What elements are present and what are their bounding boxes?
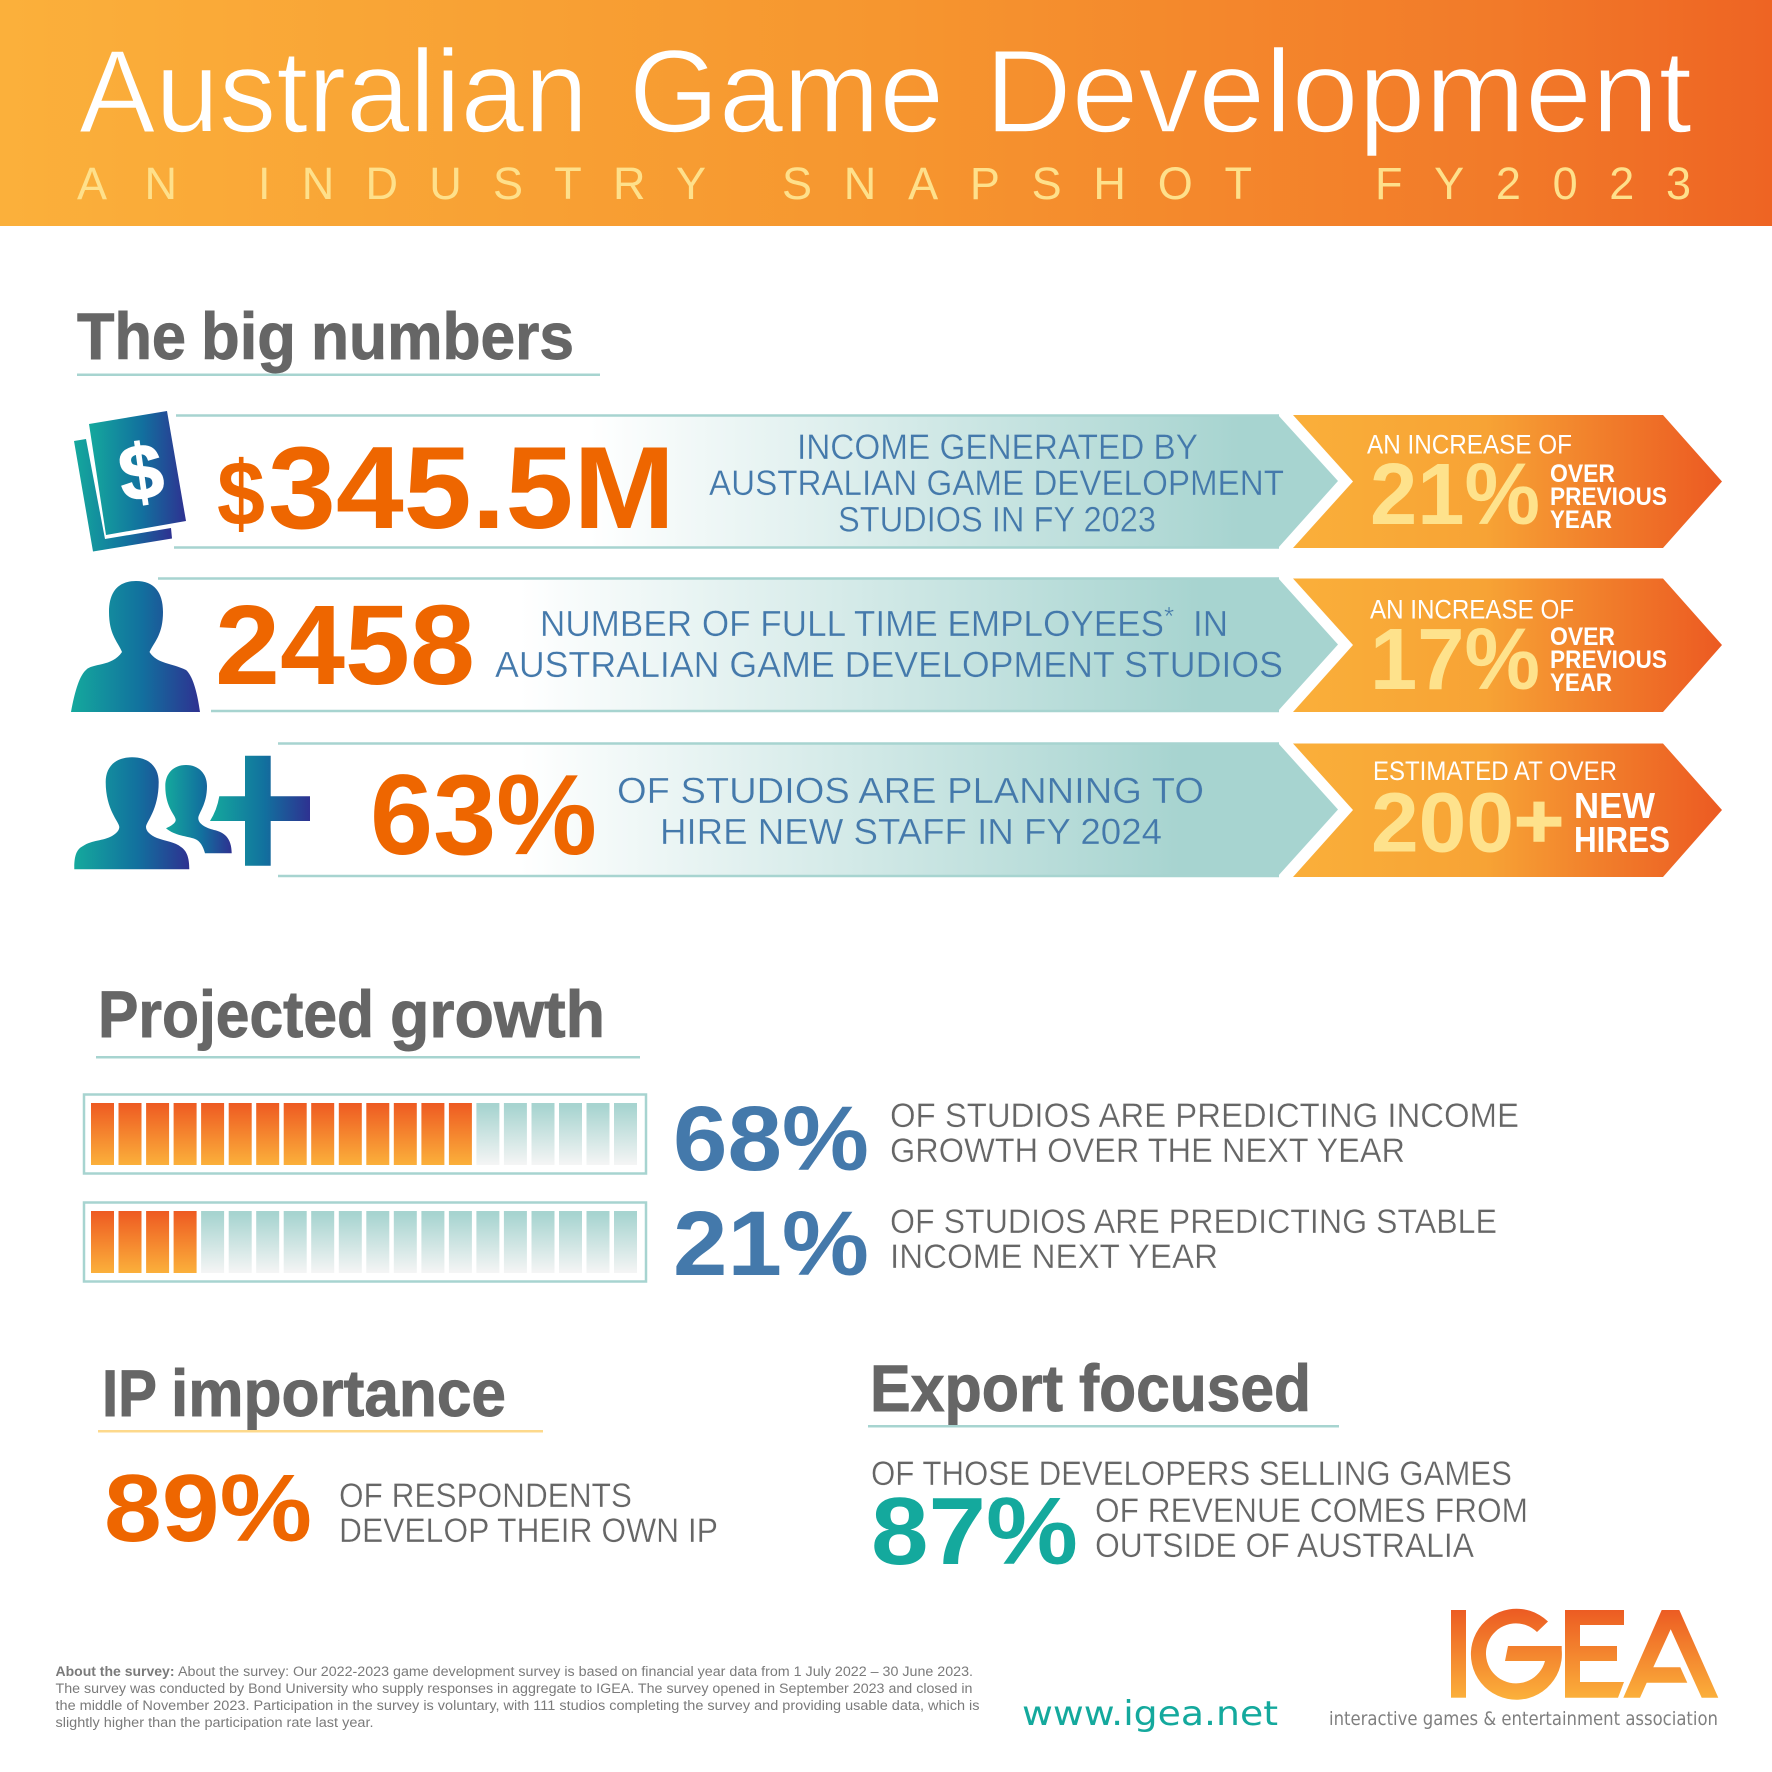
heading: the big numbers: numbers [311,299,574,373]
description: HIRE NEW STAFF IN FY 2024 [660,811,1162,852]
orange arrow: 17% increase: OVER [1550,623,1615,651]
heading: IP importance: IP [102,1356,157,1430]
orange arrow: 17% increase [1293,578,1722,712]
text: stable income: INCOME NEXT YEAR [890,1238,1218,1276]
progress bar: 68% income growth [84,1094,646,1174]
orange arrow: 17% increase: AN INCREASE OF [1370,594,1574,624]
title: Game [629,26,944,158]
text: own IP: DEVELOP THEIR OWN IP [339,1512,718,1550]
footnote: about the survey: About the survey: Our 2022-2023 game development survey is based on financial year data from 1 July 2022 – 30 June 2023. [178,1664,973,1679]
orange arrow: 21% increase: OVER [1550,460,1615,488]
description [709,428,1284,540]
footnote: about the survey: About the survey: [56,1664,174,1679]
stat: 2458: 2458 [215,582,475,708]
text: income growth: GROWTH OVER THE NEXT YEAR [890,1132,1405,1170]
heading: the big numbers: The [77,299,186,373]
footnote: about the survey [56,1664,980,1730]
title [79,26,1692,158]
subtitle: FY2023 [1375,158,1691,209]
orange arrow: 17% increase: PREVIOUS [1550,646,1667,674]
icon: people with plus [74,756,310,869]
stat: 68%: 68% [673,1088,869,1190]
subtitle: INDUSTRY [258,158,706,209]
orange arrow: 21% increase: PREVIOUS [1550,483,1667,511]
orange arrow: 200+ new hires: 200 [1371,776,1514,870]
stat: 21%: 21% [673,1193,869,1295]
stat: 87%: 87% [871,1478,1078,1585]
orange arrow: 21% increase: YEAR [1550,506,1612,534]
text: own IP: OF RESPONDENTS [339,1477,632,1515]
description [495,601,1283,685]
subtitle [77,158,1691,209]
orange arrow: 21% increase [1293,415,1722,548]
footnote: about the survey: The survey was conducted by Bond University who supply responses in aggregate to IGEA. The survey opened in September 2023 and closed in [56,1681,972,1696]
heading: the big numbers: big [201,299,296,373]
row: income [74,411,1722,553]
subtitle: SNAPSHOT [782,158,1252,209]
title: Development [985,26,1692,158]
text: export revenue [1095,1492,1528,1565]
stat: 89%: 89% [104,1455,312,1562]
text: own IP [339,1477,718,1550]
row: hiring [74,743,1722,879]
title: Australian [79,26,588,158]
subtitle: AN [77,158,177,209]
orange arrow: 21% increase: 21% [1370,446,1540,543]
text: export revenue: OF REVENUE COMES FROM [1095,1492,1528,1530]
heading: export focused [868,1351,1339,1428]
description [617,770,1204,852]
orange arrow: 200+ new hires: HIRES [1574,819,1670,860]
description: * [1164,601,1174,631]
heading: export focused: focused [1079,1351,1311,1425]
description: AUSTRALIAN GAME DEVELOPMENT [709,464,1284,503]
description: AUSTRALIAN GAME DEVELOPMENT STUDIOS [495,644,1283,685]
text: export intro: OF THOSE DEVELOPERS SELLING GAMES [871,1455,1512,1493]
orange arrow: 17% increase: YEAR [1550,669,1612,697]
teal arrow band [158,578,1338,711]
icon: banknotes with dollar sign: $ [113,425,169,519]
description: IN [1193,603,1228,644]
heading: the big numbers [77,299,600,376]
heading: IP importance: importance [171,1356,506,1430]
heading: projected growth: Projected [98,977,374,1051]
logo tagline: interactive games & entertainment association [1329,1708,1718,1730]
orange arrow: 200+ new hires: + [1514,779,1564,864]
heading: projected growth [96,977,640,1058]
stat: $345.5M: 345.5M [268,422,675,553]
stat: $345.5M: $ [217,443,265,545]
text: income growth [890,1097,1519,1170]
progress bar: 21% stable income [84,1202,646,1282]
heading: projected growth: growth [390,977,605,1051]
orange arrow: 17% increase: 17% [1370,611,1540,708]
text: export revenue: OUTSIDE OF AUSTRALIA [1095,1527,1474,1565]
orange arrow: 200+ new hires [1293,744,1722,877]
text: income growth: OF STUDIOS ARE PREDICTING INCOME [890,1097,1519,1135]
text: stable income: OF STUDIOS ARE PREDICTING STABLE [890,1203,1497,1241]
footnote: about the survey: the middle of November 2023. Participation in the survey is voluntary, with 111 studios completing the survey and providing usable data, which is [56,1698,980,1713]
text: stable income [890,1203,1497,1276]
description: NUMBER OF FULL TIME EMPLOYEES [540,603,1164,644]
logo: IGEA [1451,1609,1718,1700]
orange arrow: 200+ new hires: NEW [1574,785,1655,826]
orange arrow: 21% increase: AN INCREASE OF [1367,430,1572,460]
description: INCOME GENERATED BY [797,428,1198,467]
icon: banknotes with dollar sign [74,411,186,552]
stat: 63%: 63% [370,752,597,879]
website url: www.igea.net [1022,1694,1278,1734]
header banner [0,0,1772,226]
footnote: about the survey: slightly higher than the participation rate last year. [56,1715,374,1730]
teal arrow band [174,415,1338,548]
description: OF STUDIOS ARE PLANNING TO [617,770,1204,811]
icon: person [71,581,200,712]
heading: export focused: Export [870,1351,1063,1425]
teal arrow band [278,743,1338,876]
row: employees [71,578,1722,712]
orange arrow: 200+ new hires: ESTIMATED AT OVER [1373,756,1617,786]
description: STUDIOS IN FY 2023 [838,500,1156,540]
